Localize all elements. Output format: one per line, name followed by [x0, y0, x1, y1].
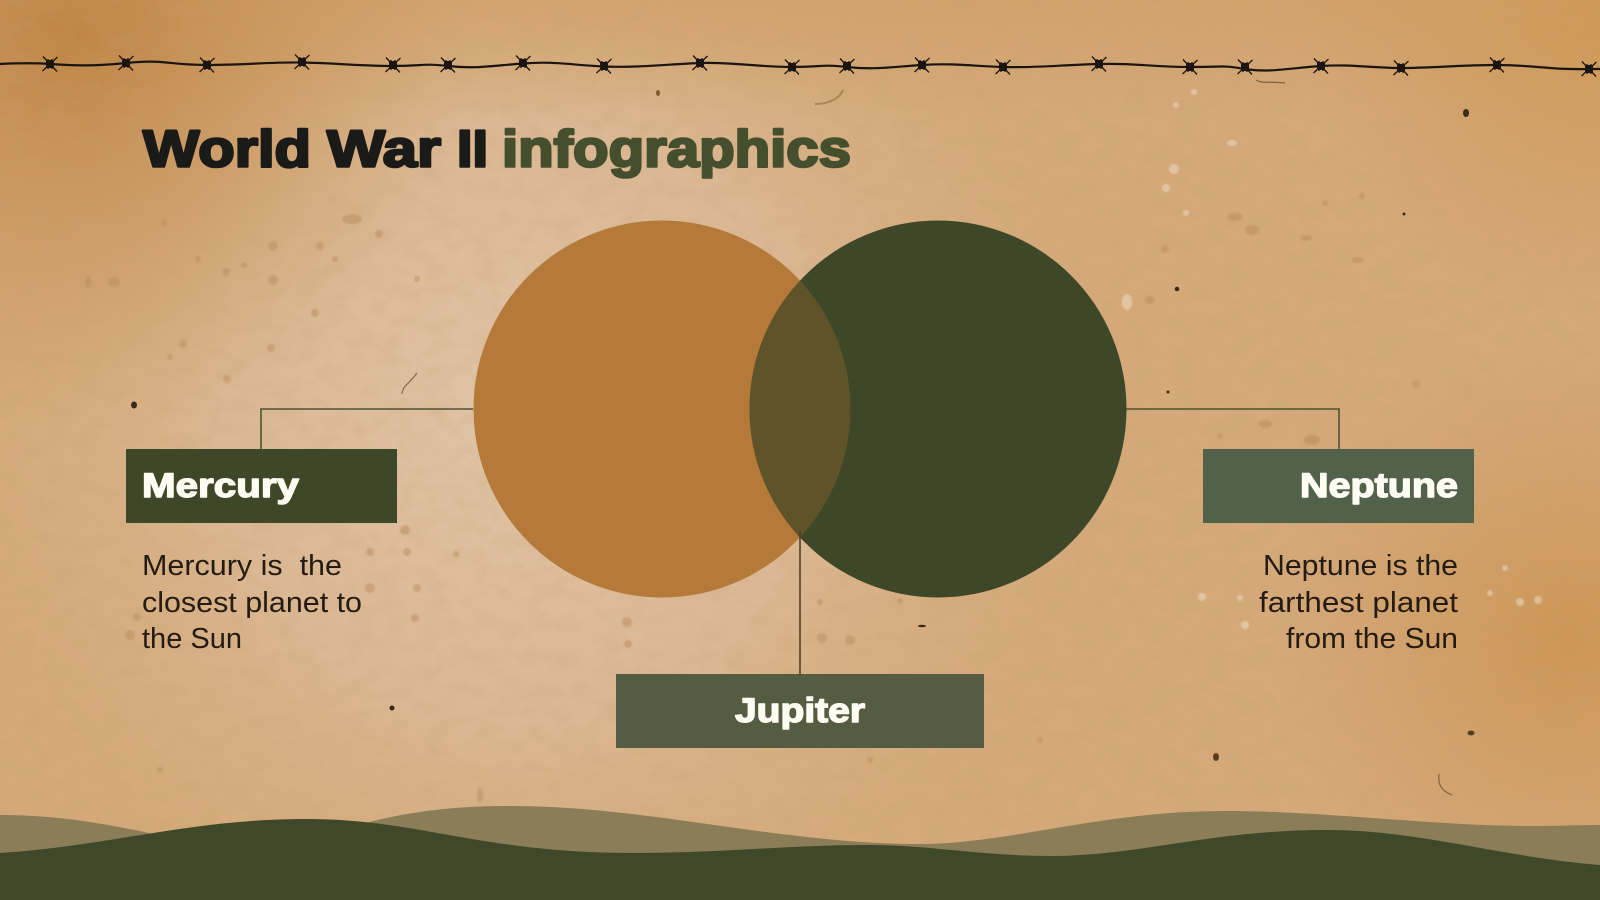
title: War — [327, 120, 441, 178]
barbed wire — [0, 54, 1600, 76]
title: World — [143, 120, 311, 178]
text: Neptune description: from the Sun — [1286, 623, 1458, 655]
text: Neptune description: farthest planet — [1259, 587, 1458, 619]
venn diagram — [474, 220, 1126, 598]
text: Mercury description: closest planet to — [142, 587, 362, 619]
text: Mercury description: Mercury is the — [142, 550, 342, 582]
text: Neptune description: Neptune is the — [1263, 550, 1458, 582]
label: Neptune — [1203, 449, 1474, 523]
overlap: Jupiter — [750, 281, 850, 537]
text: Mercury description: the Sun — [142, 623, 242, 655]
circle: Mercury — [474, 220, 850, 598]
circle: Neptune — [750, 220, 1126, 598]
title — [143, 120, 851, 178]
title: II — [457, 120, 488, 178]
back hills — [0, 806, 1600, 900]
connector: Neptune — [1126, 409, 1339, 449]
label: Jupiter — [616, 674, 984, 748]
front hills — [0, 819, 1600, 900]
title: infographics — [502, 120, 851, 178]
label: Mercury: Mercury — [142, 467, 299, 505]
label: Neptune: Neptune — [1300, 467, 1458, 505]
label: Mercury — [126, 449, 397, 523]
text: Mercury description — [142, 550, 362, 655]
connector: Jupiter — [799, 530, 801, 674]
label: Jupiter: Jupiter — [735, 692, 865, 730]
hills — [0, 806, 1600, 900]
text: Neptune description — [1259, 550, 1458, 655]
connector: Mercury — [261, 409, 473, 449]
